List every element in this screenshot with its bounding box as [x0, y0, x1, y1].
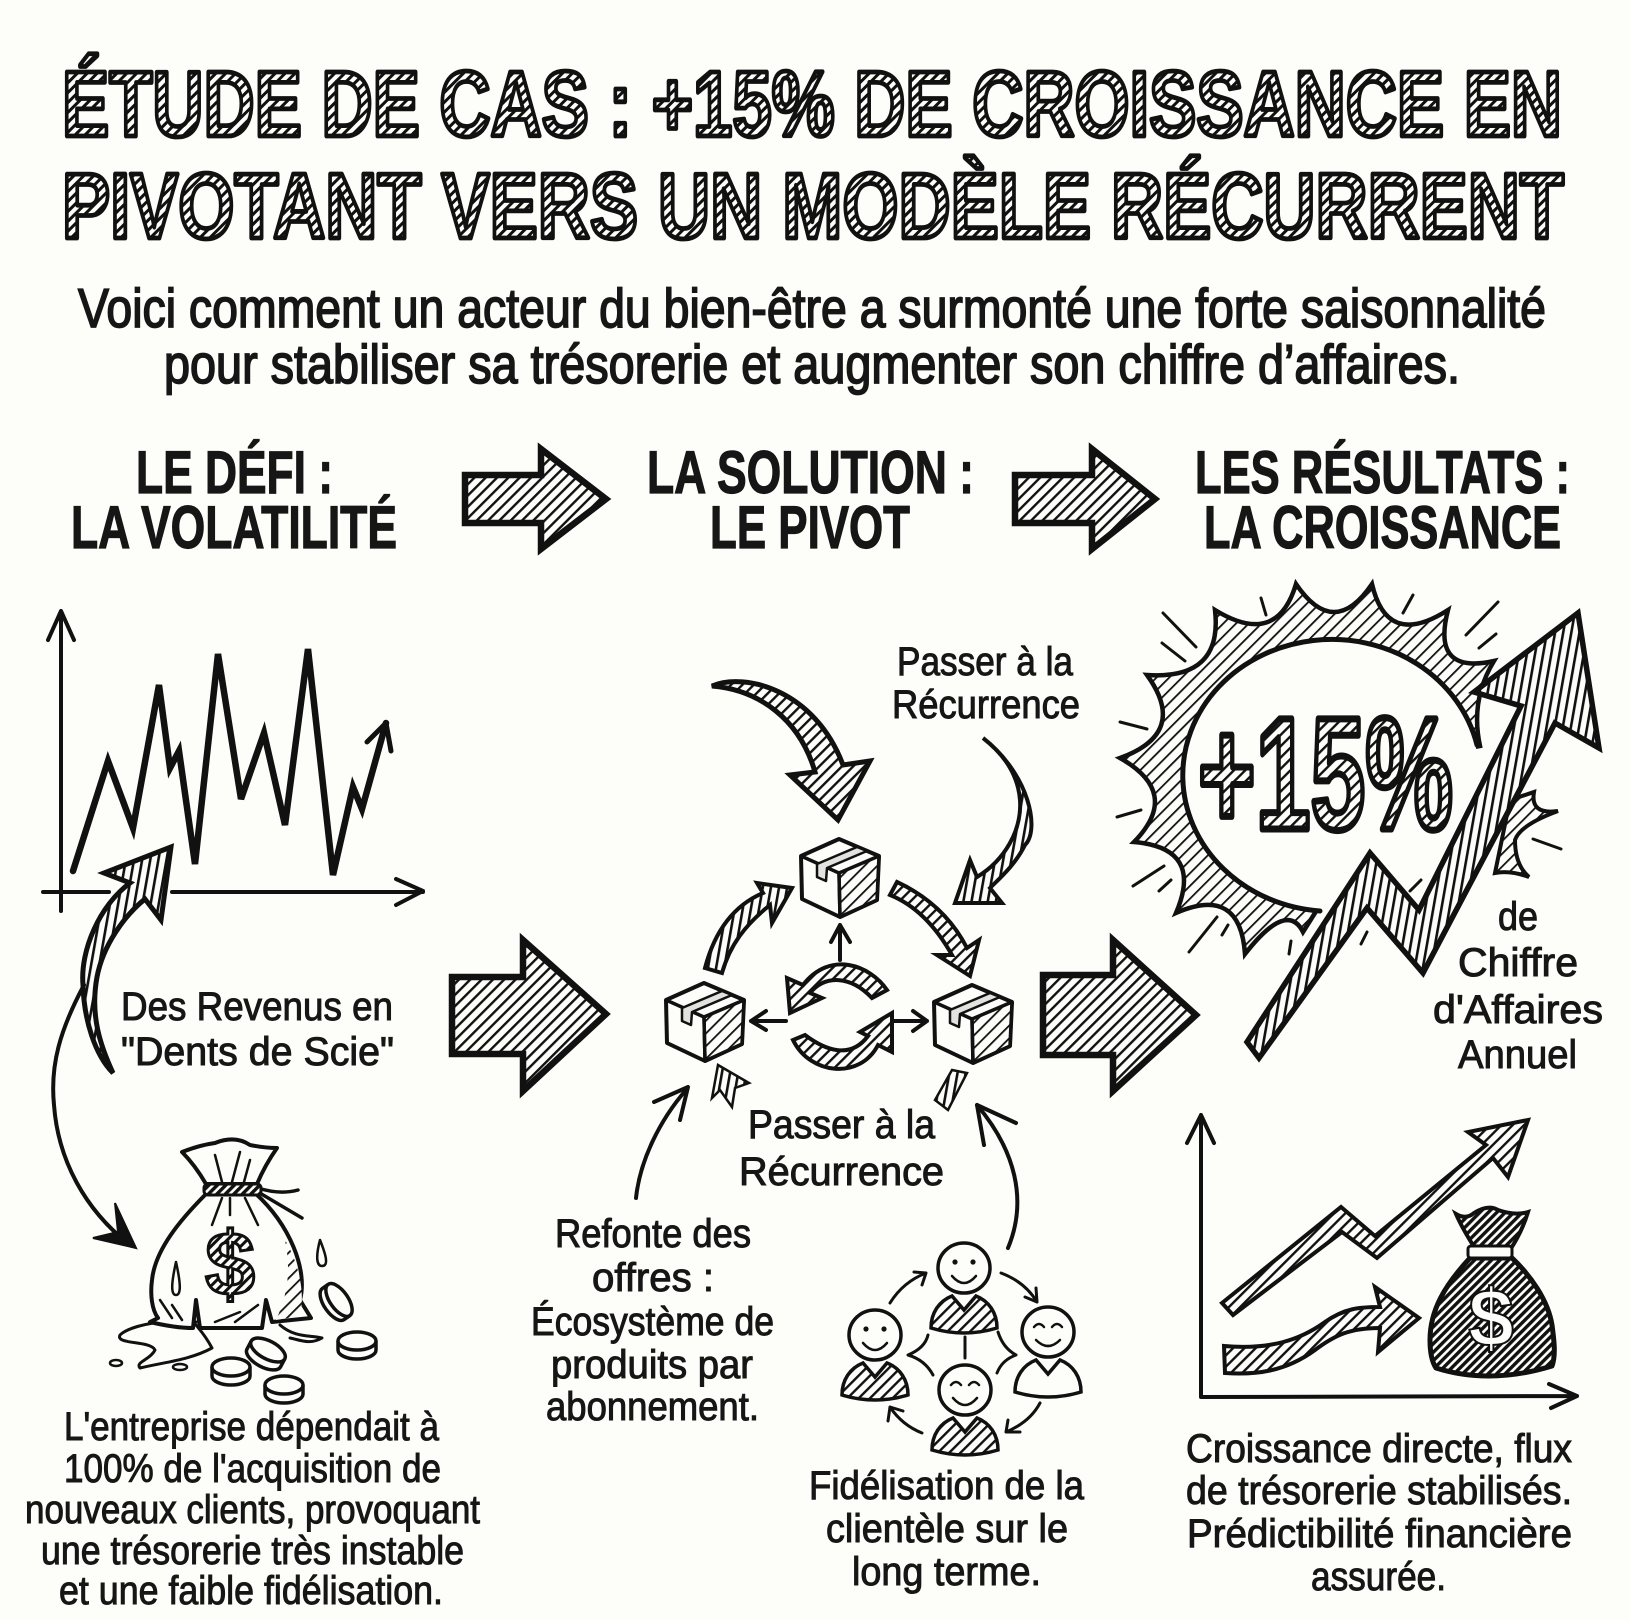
text: refonte des offres — [531, 1212, 774, 1429]
label: chiffre d'affaires annuel: Chiffre — [1458, 941, 1578, 985]
icon: full money bag — [1430, 1208, 1554, 1376]
text: défi description: nouveaux clients, provoquant — [25, 1488, 480, 1532]
text: refonte des offres: Écosystème de — [531, 1299, 774, 1344]
heading: la solution — [647, 439, 974, 561]
label: passer à la récurrence (centre) — [739, 1103, 944, 1194]
text: fidélisation: clientèle sur le — [826, 1507, 1068, 1551]
chart: stabilised growth — [1187, 1115, 1577, 1408]
label: passer à la récurrence (top): Récurrence — [892, 683, 1080, 727]
heading: la solution: LE PIVOT — [710, 494, 910, 561]
arrow: pivot to résultats — [1043, 940, 1196, 1091]
text: refonte des offres: abonnement. — [546, 1385, 759, 1429]
heading: le défi — [71, 439, 397, 561]
icon: leaking money bag — [110, 1139, 376, 1403]
icon: box left — [666, 983, 744, 1061]
text: refonte des offres: offres : — [592, 1256, 714, 1300]
icon: full money bag: $ — [1468, 1273, 1514, 1364]
arrow: big growth — [1247, 613, 1599, 1058]
chart: sawtooth revenue — [43, 611, 423, 911]
icon: leaking money bag: $ — [205, 1215, 255, 1315]
text: résultats description: de trésorerie stabilisés. — [1186, 1469, 1572, 1513]
heading: le défi: LE DÉFI : — [136, 439, 333, 506]
icon: box top — [801, 839, 879, 917]
text: résultats description: Prédictibilité financière — [1187, 1512, 1572, 1556]
text: refonte des offres: produits par — [551, 1343, 753, 1387]
label: dents de scie: Des Revenus en — [121, 985, 393, 1029]
arrow: solution to résultats — [1015, 449, 1155, 549]
subtitle — [78, 277, 1546, 395]
text: refonte des offres: Refonte des — [555, 1212, 751, 1256]
heading: le défi: LA VOLATILITÉ — [71, 494, 397, 561]
label: passer à la récurrence (top) — [892, 640, 1080, 727]
label: chiffre d'affaires annuel: d'Affaires — [1433, 988, 1603, 1032]
text: fidélisation: long terme. — [852, 1550, 1041, 1594]
text: défi description: 100% de l'acquisition de — [64, 1447, 441, 1491]
label: passer à la récurrence (top): Passer à la — [897, 640, 1074, 684]
arrow: thin curve to money bag — [53, 985, 136, 1248]
text: fidélisation — [809, 1464, 1085, 1594]
label: chiffre d'affaires annuel: de — [1498, 895, 1538, 939]
arrow: curved hatched to chart — [83, 847, 171, 1073]
label: passer à la récurrence (centre): Passer à la — [748, 1103, 936, 1147]
text: défi description: et une faible fidélisation. — [59, 1569, 443, 1613]
label: chiffre d'affaires annuel — [1433, 895, 1603, 1077]
arrow: défi to solution — [465, 449, 606, 549]
text: résultats description — [1186, 1427, 1572, 1599]
title — [62, 52, 1564, 258]
arrow: curved top right — [955, 738, 1031, 903]
arrows: cycle between boxes — [705, 882, 979, 1110]
label: passer à la récurrence (centre): Récurrence — [739, 1150, 944, 1194]
text: résultats description: Croissance directe, flux — [1186, 1427, 1572, 1471]
callout: +15% sunburst: +15% — [1198, 684, 1453, 863]
text: défi description — [25, 1405, 480, 1613]
arrow: clientèle to pivot — [977, 1105, 1017, 1248]
arrow: curved hatched top — [712, 682, 870, 820]
arrow: défi to pivot — [452, 940, 606, 1091]
icon: box right — [934, 985, 1012, 1063]
heading: les résultats — [1195, 439, 1570, 561]
arrow: offres to pivot — [636, 1087, 688, 1198]
text: fidélisation: Fidélisation de la — [809, 1464, 1085, 1508]
label: dents de scie — [121, 985, 394, 1074]
heading: la solution: LA SOLUTION : — [647, 439, 974, 506]
label: dents de scie: "Dents de Scie" — [121, 1030, 394, 1074]
text: défi description: L'entreprise dépendait à — [64, 1405, 440, 1449]
callout: +15% sunburst — [1117, 584, 1561, 954]
text: défi description: une trésorerie très instable — [41, 1529, 464, 1573]
icon: customers loop — [842, 1243, 1081, 1455]
text: résultats description: assurée. — [1311, 1555, 1446, 1599]
label: chiffre d'affaires annuel: Annuel — [1458, 1033, 1577, 1077]
